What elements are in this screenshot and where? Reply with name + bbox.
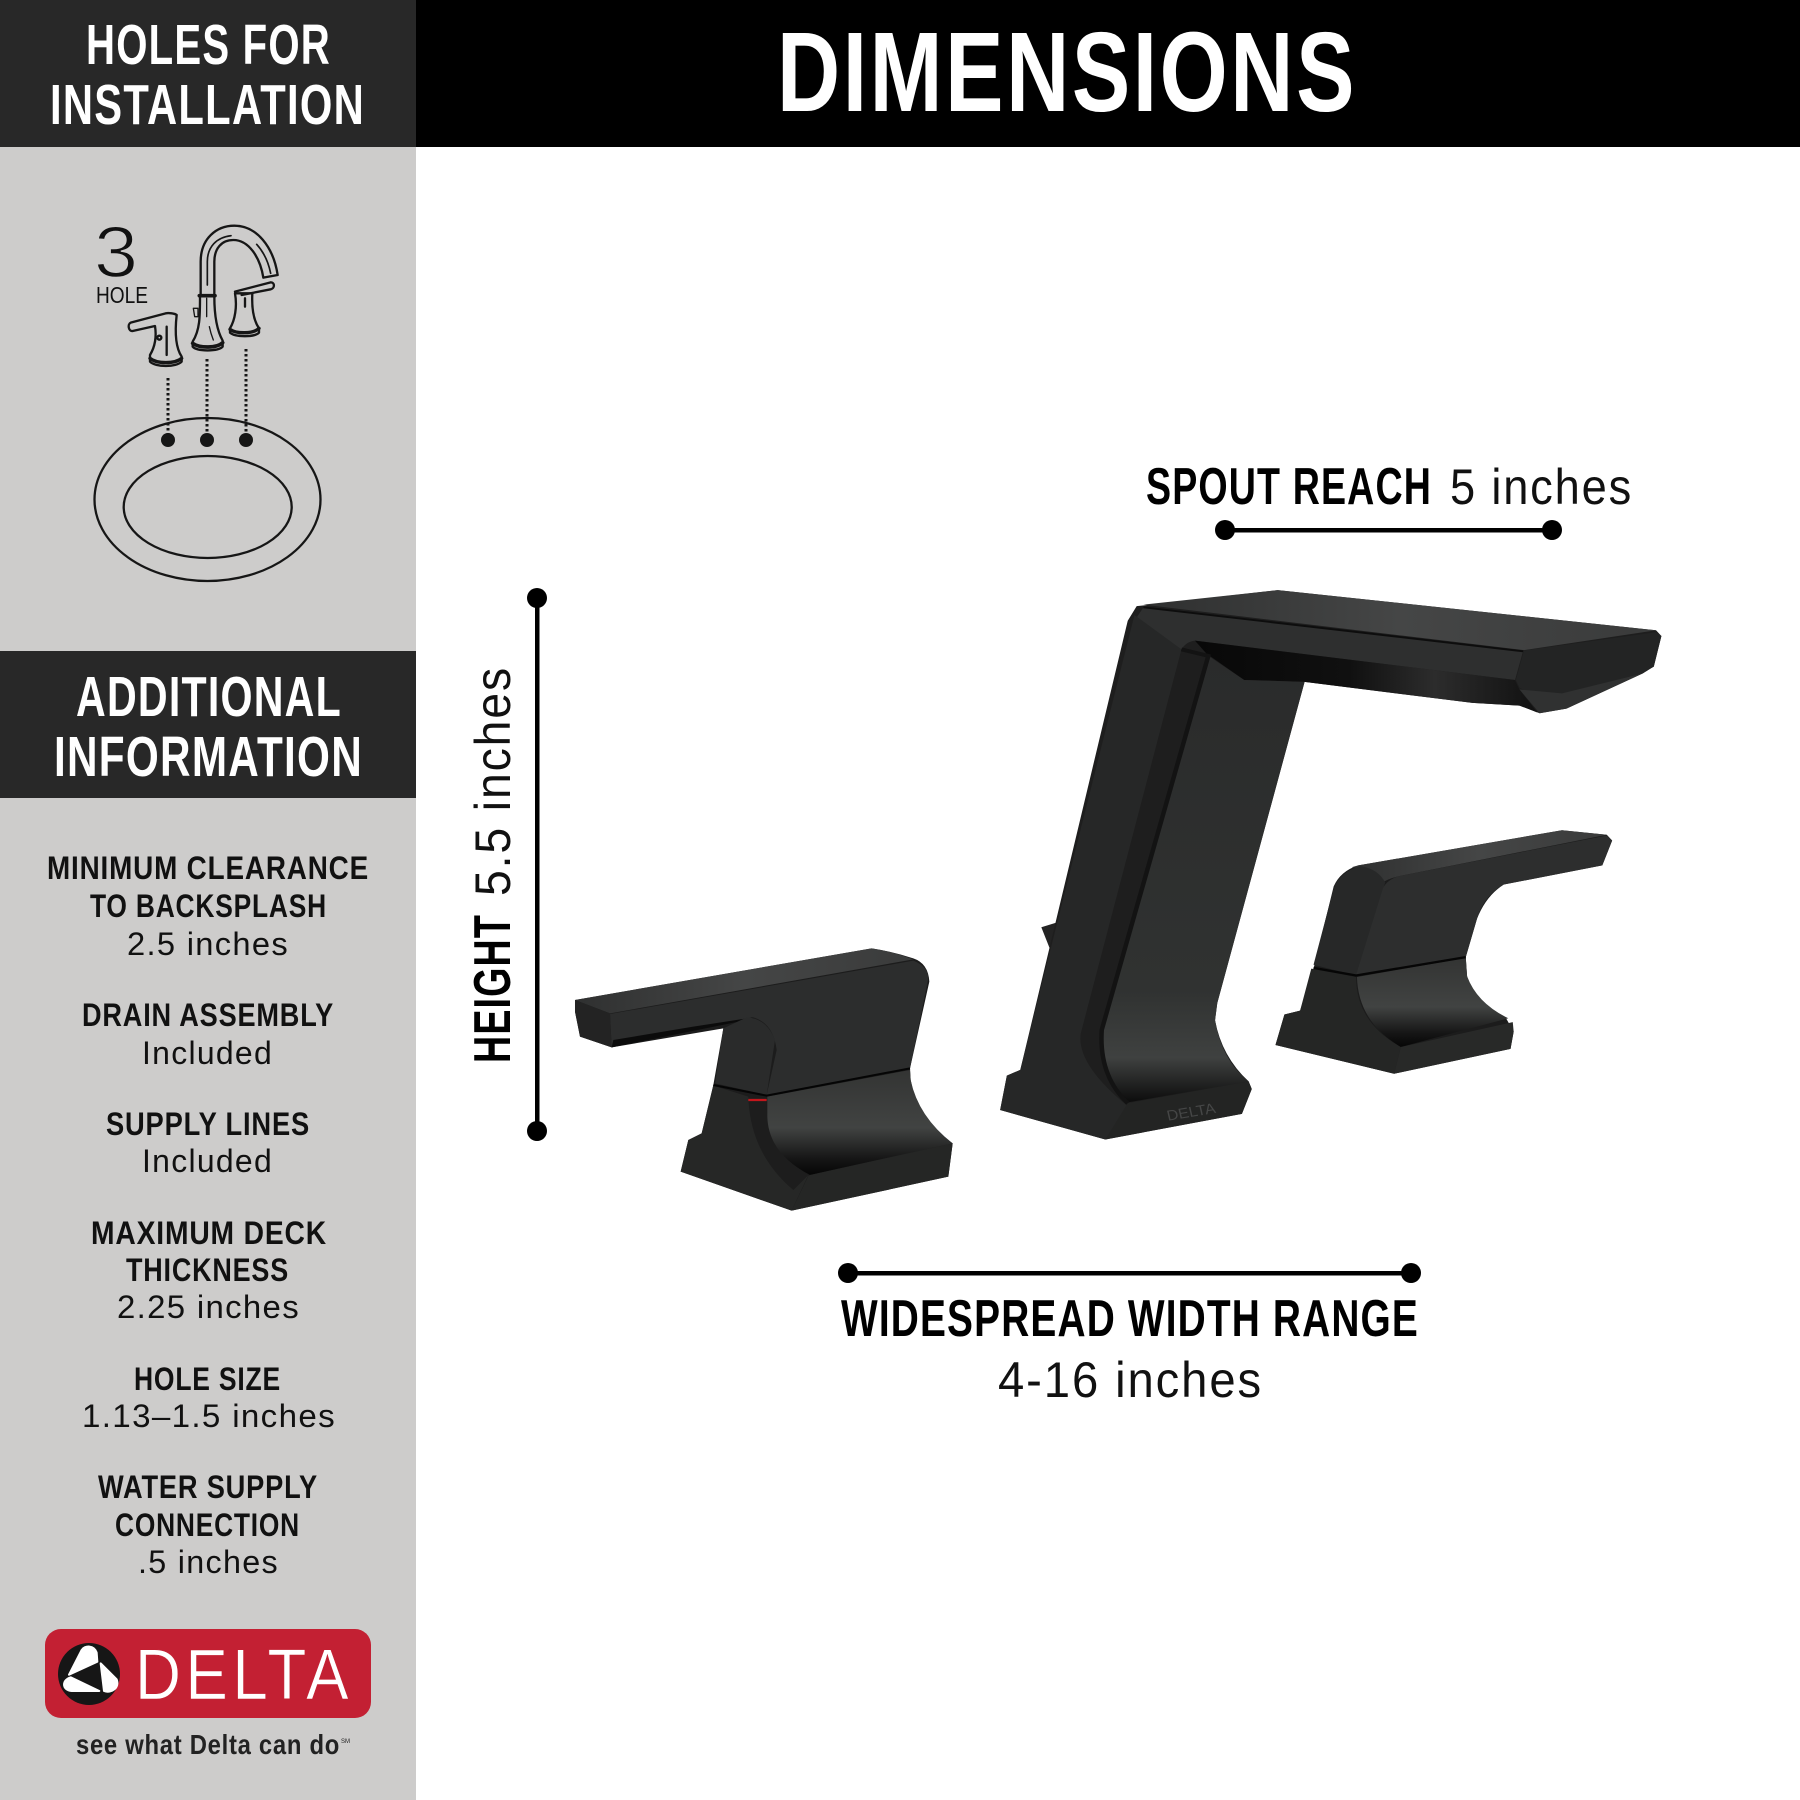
- text block: supply lines: Included: [142, 1143, 273, 1179]
- dimension: spout reach: SPOUT REACH: [1146, 458, 1432, 516]
- spout lever: [1041, 922, 1058, 949]
- header: additional information: [0, 651, 416, 798]
- icon: three hole faucet and sink: [94, 213, 320, 581]
- header: additional information: INFORMATION: [54, 725, 363, 789]
- text block: water supply connection: [98, 1469, 318, 1580]
- text block: maximum deck thickness: MAXIMUM DECK: [91, 1215, 327, 1251]
- text block: water supply connection: CONNECTION: [115, 1507, 300, 1543]
- text block: water supply connection: .5 inches: [138, 1544, 279, 1580]
- header: additional information: ADDITIONAL: [76, 665, 342, 729]
- text block: minimum clearance: 2.5 inches: [127, 926, 289, 962]
- title: dimensions: DIMENSIONS: [777, 9, 1357, 135]
- spout body: DELTA: [1165, 1101, 1218, 1124]
- text block: hole size: [82, 1361, 336, 1434]
- logo: delta: SM: [341, 1739, 350, 1745]
- text block: hole size: HOLE SIZE: [134, 1361, 281, 1397]
- header: holes for installation: HOLES FOR: [86, 13, 331, 77]
- text block: drain assembly: Included: [142, 1035, 273, 1071]
- icon: three hole faucet and sink: 3: [94, 213, 138, 293]
- text block: supply lines: SUPPLY LINES: [106, 1106, 310, 1142]
- text block: water supply connection: WATER SUPPLY: [98, 1469, 318, 1505]
- text block: maximum deck thickness: THICKNESS: [126, 1252, 289, 1288]
- text block: supply lines: [106, 1106, 310, 1179]
- text block: maximum deck thickness: [91, 1215, 327, 1325]
- header: holes for installation: [0, 0, 416, 147]
- dimension: widespread width range: 4-16 inches: [998, 1352, 1263, 1408]
- logo: delta: [45, 1629, 371, 1760]
- header: holes for installation: INSTALLATION: [50, 73, 365, 137]
- dimension: spout reach: 5 inches: [1450, 459, 1633, 515]
- faucet: left handle: [575, 948, 953, 1211]
- icon: three hole faucet and sink: HOLE: [96, 282, 148, 308]
- text block: hole size: 1.13–1.5 inches: [82, 1398, 336, 1434]
- dimension: widespread width range: [838, 1263, 1421, 1408]
- text block: minimum clearance: [47, 850, 369, 962]
- dimension: height: [464, 588, 547, 1141]
- logo: delta: see what Delta can do: [76, 1729, 340, 1760]
- dimension: spout reach: [1146, 458, 1633, 540]
- faucet: spout and right handle: [1000, 590, 1661, 1139]
- text block: minimum clearance: TO BACKSPLASH: [90, 888, 327, 924]
- title: dimensions: [416, 0, 1800, 147]
- text block: maximum deck thickness: 2.25 inches: [117, 1289, 300, 1325]
- text block: minimum clearance: MINIMUM CLEARANCE: [47, 850, 369, 886]
- logo: delta: DELTA: [135, 1636, 353, 1715]
- text block: drain assembly: DRAIN ASSEMBLY: [82, 997, 334, 1033]
- spout body: [1000, 590, 1661, 1139]
- dimension: widespread width range: WIDESPREAD WIDTH RANGE: [841, 1290, 1419, 1348]
- right handle: [1275, 830, 1612, 1074]
- text block: drain assembly: [82, 997, 334, 1071]
- panel: sidebar background: [0, 147, 416, 1800]
- dimension: height: 5.5 inches: [465, 666, 521, 896]
- dimension: height: HEIGHT: [464, 914, 522, 1063]
